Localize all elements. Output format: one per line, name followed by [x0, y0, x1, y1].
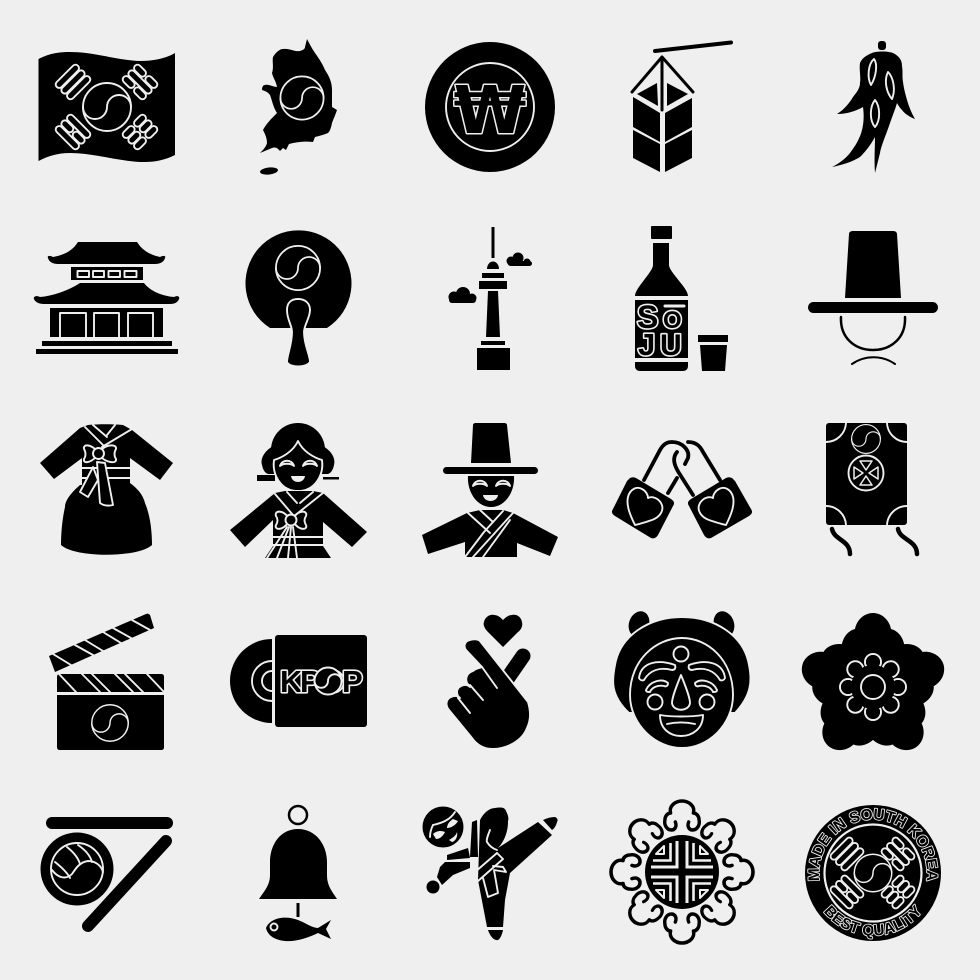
- icon: man in hanbok and gat: [422, 423, 558, 557]
- icon: soju bottle and glass: O: [663, 307, 682, 334]
- icon: traditional hahoe mask: [613, 608, 751, 748]
- icon: won coin: ₩: [454, 72, 526, 149]
- icon: taegeuk hand fan: [245, 230, 352, 366]
- icon: made in South Korea badge: BEST QUALITY: [823, 904, 921, 940]
- icon: soju bottle and glass: U: [660, 329, 682, 362]
- icon: kimbap roll and chopsticks: [40, 823, 167, 926]
- icon: N Seoul Tower with clouds: [448, 227, 532, 370]
- icon: soju bottle and glass: J: [638, 327, 655, 362]
- icon: K-pop album and disc: P: [342, 664, 363, 699]
- icon: made in South Korea badge: MADE IN SOUTH KOREA: [807, 808, 938, 882]
- icon: taekwondo kicker: [422, 806, 558, 940]
- icon: won coin: [425, 42, 555, 172]
- icon: soju bottle and glass: [635, 226, 728, 371]
- icon: woman in hanbok: [230, 423, 367, 558]
- icon: ginseng root: [832, 41, 915, 173]
- icon: made in South Korea badge: [805, 805, 941, 941]
- icon: mugunghwa flower: [793, 613, 953, 765]
- icon: cloud ornament emblem: [611, 801, 753, 943]
- icon: takeaway food box with chopstick: [632, 42, 731, 172]
- icon: Korean flag: [38, 52, 175, 162]
- icon: K-pop album and disc: K: [280, 664, 303, 699]
- icon: finger heart hand: [447, 615, 530, 749]
- icon: K-pop album and disc: [230, 635, 367, 727]
- icon: hanok palace: [34, 242, 179, 354]
- icon: gat traditional hat: [808, 231, 938, 364]
- icon: map of South Korea: [260, 39, 337, 175]
- icon: K-pop album and disc: O: [320, 664, 344, 699]
- icon: love padlocks: [612, 442, 752, 538]
- icon: bokjumeoni pouch: [826, 423, 917, 554]
- icon: film clapperboard: [49, 614, 164, 750]
- icon: soju bottle and glass: S: [637, 299, 658, 335]
- icon: K-pop album and disc: P: [300, 664, 321, 699]
- icon: hanbok dress: [40, 424, 173, 555]
- icon: bell with fish: [259, 806, 337, 941]
